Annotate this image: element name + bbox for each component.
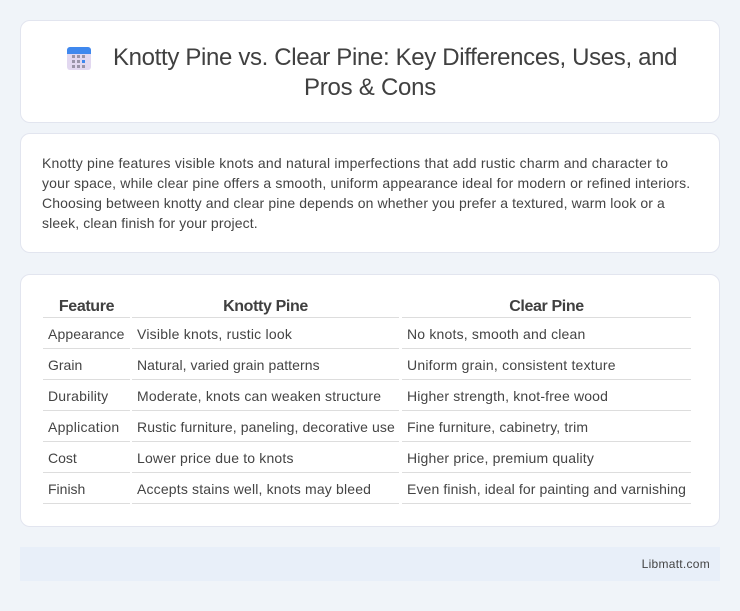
intro paragraph: Knotty pine features visible knots and natural imperfections that add rustic charm and character to [42, 155, 668, 171]
footer bar [20, 547, 720, 581]
comparison table: Fine furniture, cabinetry, trim [407, 419, 588, 435]
comparison table: Even finish, ideal for painting and varnishing [407, 481, 686, 497]
title: Knotty Pine vs. Clear Pine: Key Differences, Uses, and [113, 44, 677, 71]
comparison table: Knotty Pine [223, 298, 308, 315]
panel: intro text card [20, 133, 720, 253]
comparison table: Higher price, premium quality [407, 450, 594, 466]
intro paragraph [42, 155, 690, 231]
comparison table: Moderate, knots can weaken structure [137, 388, 381, 404]
icon: calendar [67, 47, 91, 70]
comparison table: Appearance [48, 326, 125, 342]
panel: comparison table card [20, 274, 720, 527]
comparison table: Natural, varied grain patterns [137, 357, 320, 373]
intro paragraph: Choosing between knotty and clear pine depends on whether you prefer a textured, warm look or a [42, 195, 665, 211]
comparison table: Accepts stains well, knots may bleed [137, 481, 371, 497]
comparison table: Higher strength, knot-free wood [407, 388, 608, 404]
intro paragraph: your space, while clear pine offers a smooth, uniform appearance ideal for modern or refined interiors. [42, 175, 690, 191]
comparison table: Visible knots, rustic look [137, 326, 292, 342]
comparison table: Clear Pine [509, 298, 584, 315]
comparison table: Feature [59, 298, 114, 315]
footer text: Libmatt.com [642, 557, 710, 571]
comparison table: No knots, smooth and clean [407, 326, 585, 342]
comparison table: Rustic furniture, paneling, decorative use [137, 419, 395, 435]
comparison table: Cost [48, 450, 77, 466]
comparison table: Grain [48, 357, 82, 373]
comparison table: Lower price due to knots [137, 450, 294, 466]
comparison table: Finish [48, 481, 85, 497]
comparison table [43, 298, 691, 504]
comparison table: Application [48, 419, 119, 435]
title line 2: Pros & Cons [304, 74, 436, 101]
panel: title card [20, 20, 720, 123]
comparison table: Durability [48, 388, 108, 404]
intro paragraph: sleek, clean finish for your project. [42, 215, 258, 231]
comparison table: Uniform grain, consistent texture [407, 357, 616, 373]
